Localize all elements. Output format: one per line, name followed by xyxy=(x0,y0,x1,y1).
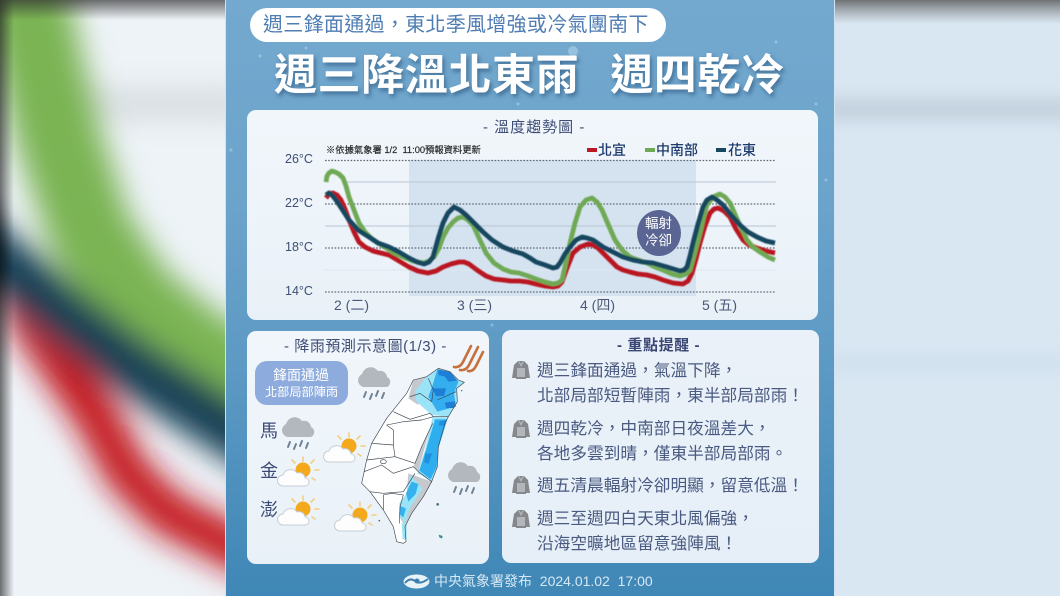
icon: sun and cloud south xyxy=(334,502,376,531)
map: Taiwan rainfall xyxy=(362,368,464,543)
county boundaries xyxy=(362,368,464,543)
icon: jacket xyxy=(512,420,530,438)
callout: radiative cooling: 冷卻 xyxy=(645,233,672,248)
main poster background xyxy=(226,0,834,596)
heavy rain areas xyxy=(433,369,457,408)
offshore island labels xyxy=(260,421,278,520)
reminder text: 週三鋒面通過，氣溫下降， 北部局部短暫陣雨，東半部局部雨！ xyxy=(537,361,804,405)
heading: rain forecast: - 降雨預測示意圖(1/3) - xyxy=(284,338,447,355)
data note: ※依據氣象署 1/2 11:00預報資料更新 xyxy=(326,145,481,155)
footer: publisher and date xyxy=(404,573,653,589)
icon: jacket xyxy=(512,510,530,528)
heading: temperature trend: - 溫度趨勢圖 - xyxy=(483,119,585,136)
panel: rain forecast xyxy=(247,331,489,564)
reminder text: 週五清晨輻射冷卻明顯，留意低溫！ xyxy=(537,476,804,495)
icon: jacket xyxy=(512,476,530,494)
reminder 4 xyxy=(512,509,754,553)
offshore island labels: 馬 xyxy=(260,421,278,441)
reminder 1 xyxy=(512,361,804,405)
callout: front passing xyxy=(255,361,348,405)
callout: radiative cooling xyxy=(637,210,681,256)
reminder 3 xyxy=(512,476,804,495)
island outline fill xyxy=(362,368,464,543)
offshore island labels: 金 xyxy=(260,461,278,481)
grey rain edge xyxy=(399,377,433,527)
blurred background: left xyxy=(0,0,225,596)
icon: sun and cloud Kinmen xyxy=(278,457,319,486)
icon: sun and cloud Penghu xyxy=(278,496,319,525)
icon: rain cloud east xyxy=(448,462,480,494)
x axis labels: 5 (五) xyxy=(702,297,737,313)
y axis labels: 22°C xyxy=(285,196,313,210)
callout: front passing: 鋒面通過 xyxy=(273,367,329,383)
callout: front passing: 北部局部陣雨 xyxy=(265,385,338,399)
reminder 2 xyxy=(512,419,787,463)
icon: rain cloud north xyxy=(358,367,390,399)
offshore islets xyxy=(436,503,439,506)
x axis labels: 3 (三) xyxy=(457,297,492,313)
panel: key reminders xyxy=(502,330,819,563)
y axis labels: 18°C xyxy=(285,240,313,254)
y axis labels: 26°C xyxy=(285,152,313,166)
mid rain areas xyxy=(428,369,458,412)
blurred background: right xyxy=(835,0,1060,366)
icon: sun and cloud central xyxy=(324,433,365,462)
x axis labels xyxy=(334,297,737,313)
icon: jacket xyxy=(512,361,530,379)
icon: strong wind xyxy=(454,346,483,371)
reminder text: 週四乾冷，中南部日夜溫差大， 各地多雲到晴，僅東半部局部雨。 xyxy=(537,419,787,463)
legend xyxy=(587,142,756,158)
y axis labels xyxy=(285,152,313,298)
legend: 中南部 xyxy=(656,142,698,158)
subtitle pill xyxy=(250,8,666,42)
callout: radiative cooling: 輻射 xyxy=(645,216,672,231)
title: 週三降溫北東雨 週四乾冷 xyxy=(274,52,785,100)
reminder text: 週三至週四白天東北風偏強， 沿海空曠地區留意強陣風！ xyxy=(537,509,754,553)
footer text: 中央氣象署發布 2024.01.02 17:00 xyxy=(434,573,653,589)
icon: rain cloud Matsu xyxy=(282,417,314,449)
icon: weather agency logo xyxy=(404,574,430,588)
decorative snow xyxy=(230,40,828,326)
x axis labels: 2 (二) xyxy=(334,297,369,313)
subtitle pill: 週三鋒面通過，東北季風增強或冷氣團南下 xyxy=(263,14,649,36)
y axis labels: 14°C xyxy=(285,284,313,298)
panel: temperature trend xyxy=(247,110,818,320)
legend: 北宜 xyxy=(598,142,626,158)
light rain areas xyxy=(415,368,464,417)
heading: key reminders: - 重點提醒 - xyxy=(617,337,700,354)
x axis labels: 4 (四) xyxy=(580,297,615,313)
legend: 花東 xyxy=(728,142,756,158)
offshore island labels: 澎 xyxy=(260,500,278,520)
